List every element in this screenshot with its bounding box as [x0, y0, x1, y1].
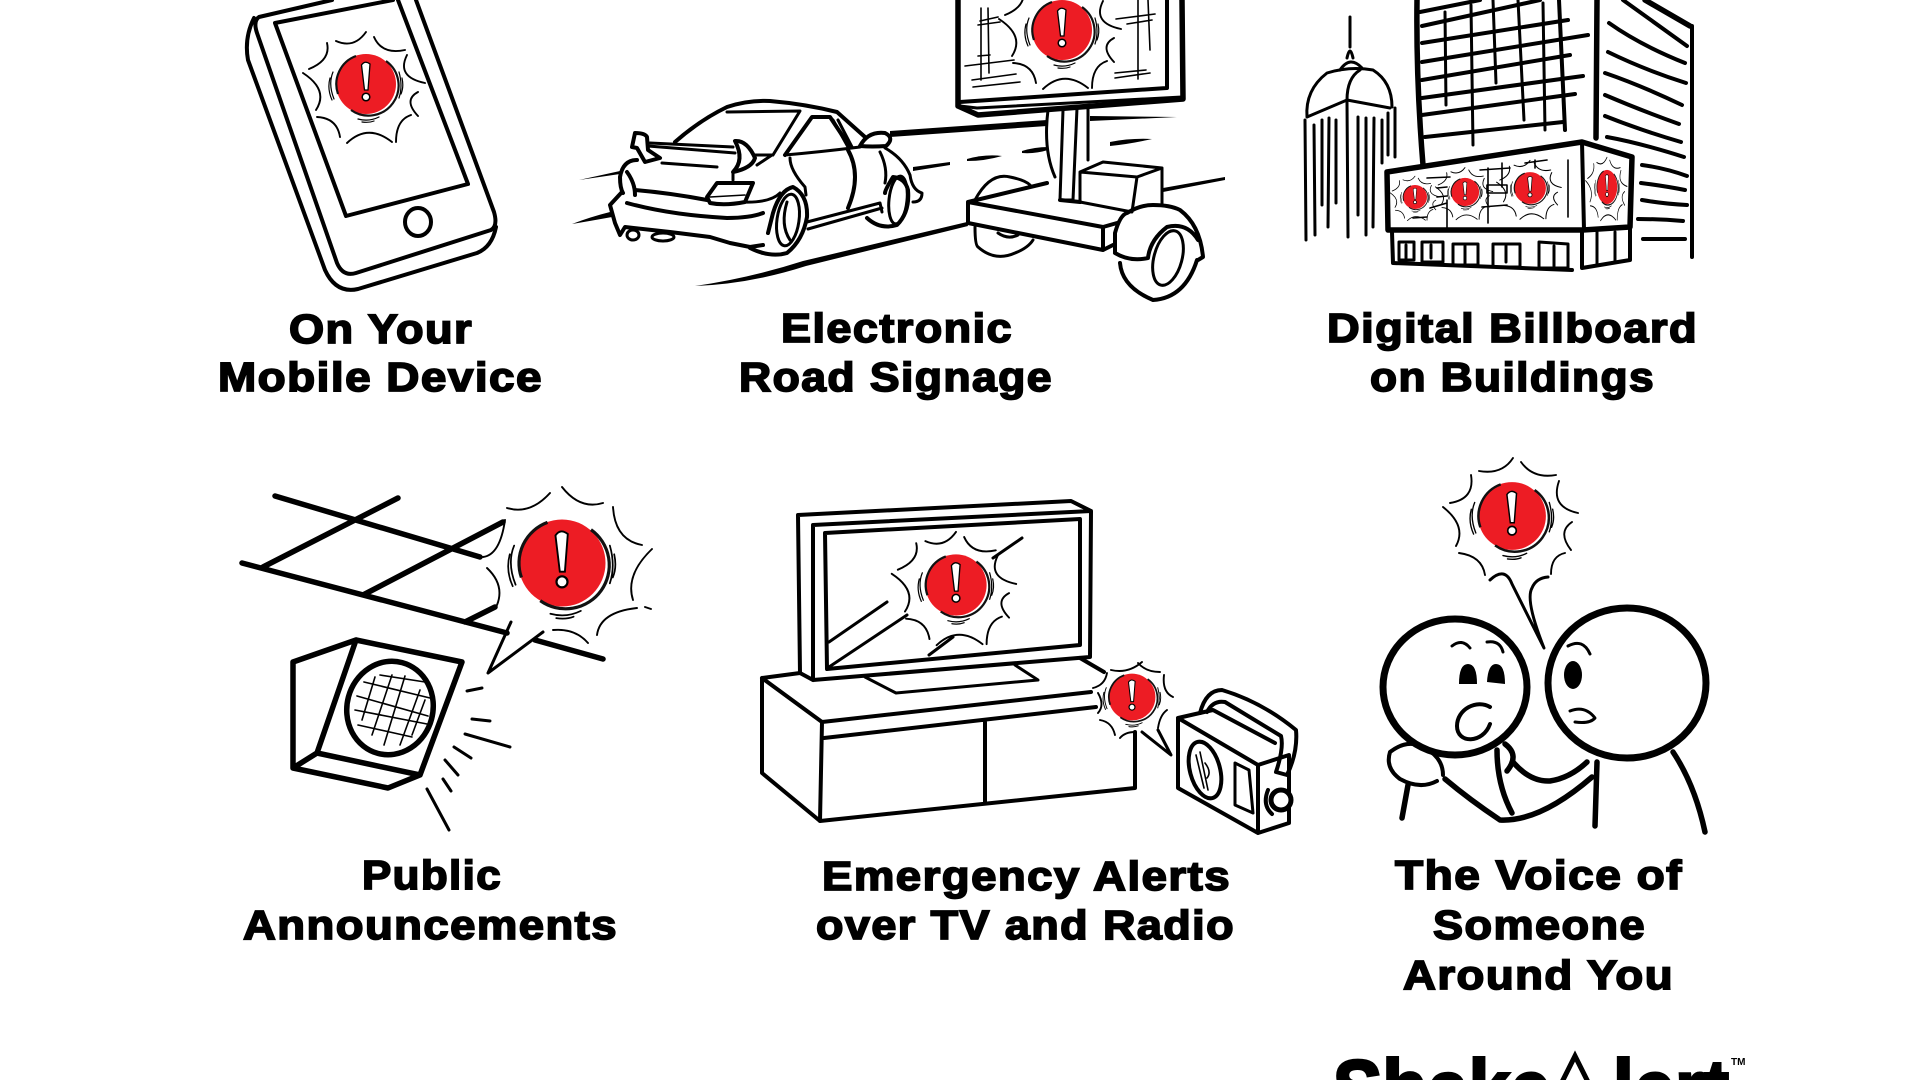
icon: alert burst 1 on billboard	[1390, 176, 1439, 221]
heading: digital billboard on buildings	[1327, 305, 1698, 400]
illustration: building-mounted digital billboard	[1387, 142, 1632, 270]
illustration: portable radio	[1178, 690, 1296, 833]
icon: alert burst on phone screen	[303, 32, 425, 143]
illustration: roadside electronic sign on trailer	[958, 0, 1203, 300]
heading: emergency alerts over tv and radio: Emergency Alerts	[822, 853, 1231, 899]
illustration: wall speaker with sound lines	[293, 640, 510, 830]
panel: electronic road signage	[572, 0, 1225, 400]
illustration: sports car seen from behind	[610, 101, 922, 255]
logo: ShakeAlert wordmark, cropped at bottom edge: TM	[1731, 1057, 1745, 1068]
illustration: ceiling truss	[242, 496, 603, 659]
heading: digital billboard on buildings: on Buildings	[1370, 354, 1655, 400]
icon: alert burst 2 on billboard	[1435, 168, 1493, 220]
heading: public announcements: Announcements	[243, 902, 618, 948]
icon: alert burst on billboard side	[1586, 157, 1627, 221]
heading: on your mobile device: On Your	[289, 306, 473, 352]
icon: alert burst on tv screen	[892, 532, 1016, 645]
heading: electronic road signage: Electronic	[781, 305, 1013, 351]
heading: the voice of someone around you: Around You	[1403, 952, 1674, 998]
heading: electronic road signage: Road Signage	[739, 354, 1053, 400]
illustration: flat screen tv on cabinet	[762, 501, 1135, 821]
illustration: two stick figures talking	[1383, 608, 1706, 832]
icon: alert speech burst from radio	[1093, 662, 1173, 755]
illustration: road lines	[572, 116, 1225, 286]
panel: emergency alerts over tv and radio	[762, 501, 1296, 948]
heading: the voice of someone around you	[1395, 852, 1683, 998]
logo: ShakeAlert wordmark, cropped at bottom edge	[1333, 1044, 1745, 1080]
illustration: domed tower	[1305, 17, 1395, 240]
icon: alert speech burst above figures	[1443, 458, 1578, 648]
icon: alert burst on road sign	[999, 0, 1121, 89]
heading: the voice of someone around you: The Voice of	[1395, 852, 1683, 898]
heading: emergency alerts over tv and radio	[816, 853, 1235, 948]
panel: the voice of someone around you	[1383, 458, 1706, 998]
panel: on your mobile device	[218, 0, 543, 400]
icon: alert burst 3 on billboard	[1497, 160, 1561, 219]
heading: digital billboard on buildings: Digital Billboard	[1327, 305, 1698, 351]
heading: electronic road signage	[739, 305, 1053, 400]
heading: on your mobile device: Mobile Device	[218, 354, 543, 400]
panel: digital billboard on buildings	[1305, 0, 1698, 400]
heading: public announcements: Public	[362, 852, 502, 898]
icon: alert speech burst	[483, 487, 652, 673]
panel: public announcements	[242, 487, 652, 948]
illustration: office towers	[1417, 0, 1692, 257]
heading: public announcements	[243, 852, 618, 948]
heading: the voice of someone around you: Someone	[1433, 902, 1646, 948]
heading: on your mobile device	[218, 306, 543, 400]
icon: tilted smartphone	[247, 0, 496, 290]
heading: emergency alerts over tv and radio: over TV and Radio	[816, 902, 1235, 948]
